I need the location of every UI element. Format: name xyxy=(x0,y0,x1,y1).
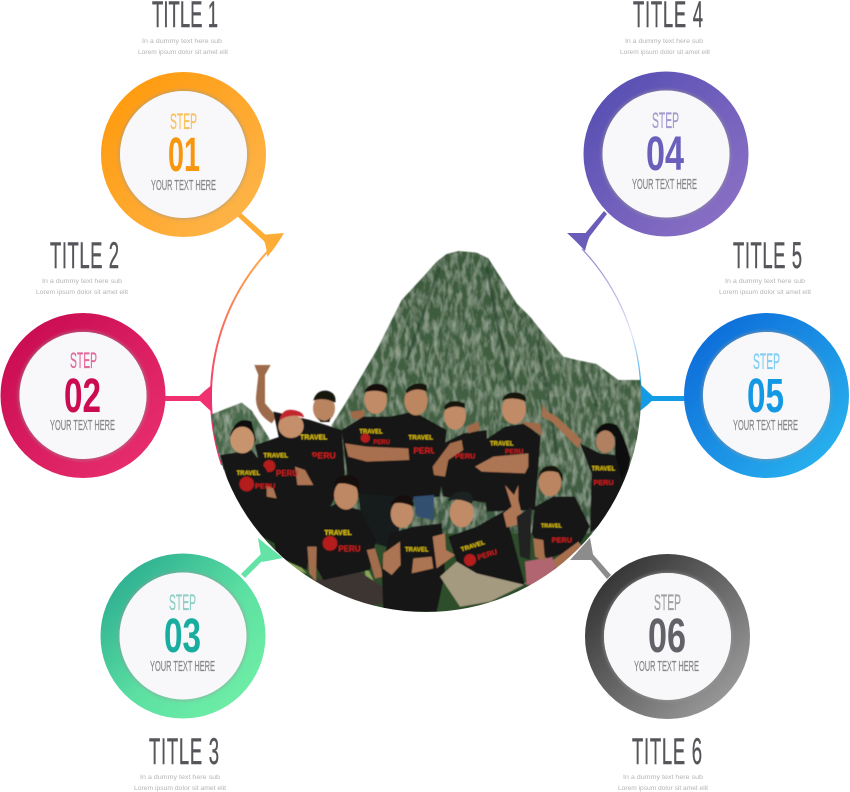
description 6: Lorem ipsum dolor sit amet elit xyxy=(618,786,708,792)
ring 3 xyxy=(110,563,256,709)
label 2 xyxy=(50,348,115,434)
person: center arms crossed: PERU xyxy=(373,440,390,446)
description 1: In a dummy text here sub xyxy=(142,39,223,45)
description 4: Lorem ipsum dolor sit amet elit xyxy=(620,50,710,56)
description 4: In a dummy text here sub xyxy=(625,39,704,45)
description 6: In a dummy text here sub xyxy=(623,775,704,781)
disc 6 xyxy=(602,572,732,702)
title 5: TITLE 5 xyxy=(733,236,802,277)
person: far right crouching xyxy=(517,466,590,585)
person: front right kneeling: TRAVEL xyxy=(460,539,486,554)
description 2: In a dummy text here sub xyxy=(42,279,123,285)
description 1 xyxy=(138,39,228,56)
person: right standing man: TRAVEL xyxy=(490,442,514,448)
person: raised arm man xyxy=(254,365,345,523)
person: far right crouching: TRAVEL xyxy=(541,523,563,529)
title 2: TITLE 2 xyxy=(50,236,119,277)
person: third back: PERU xyxy=(455,451,475,460)
person: front left kneeling: PERU xyxy=(338,545,361,554)
description 2 xyxy=(36,279,128,296)
person: far right crouching: PERU xyxy=(552,536,572,545)
ring 2 xyxy=(10,322,156,468)
person: front right kneeling xyxy=(433,485,527,607)
description 6 xyxy=(618,775,708,792)
person: woman right xyxy=(542,404,631,533)
disc 3 xyxy=(118,571,248,701)
description 4 xyxy=(620,39,710,56)
panel: step 2 xyxy=(10,236,156,468)
label 4: 04 xyxy=(646,128,684,181)
panel: step 1 xyxy=(110,0,256,227)
person: front left kneeling: TRAVEL xyxy=(324,530,352,537)
person: red cap man xyxy=(255,410,317,570)
label 1: 01 xyxy=(168,129,200,182)
ring 1 xyxy=(110,82,256,228)
label 2: STEP xyxy=(70,348,97,373)
photo: team in front of mountain xyxy=(210,251,642,617)
person: standing behind: TRAVEL xyxy=(408,434,433,441)
label 4: STEP xyxy=(652,108,679,133)
connector arc right xyxy=(582,249,641,390)
connector arc left xyxy=(211,251,268,465)
person: woman left: TRAVEL xyxy=(237,471,261,477)
label 6 xyxy=(634,590,699,675)
person: woman left xyxy=(220,420,277,543)
person: center arms crossed xyxy=(342,384,410,550)
ring 4 xyxy=(593,81,739,227)
connector: step 6 xyxy=(570,538,611,579)
label 6: 06 xyxy=(648,610,686,663)
panel: step 4: YOUR TEXT HERE xyxy=(632,176,697,193)
label 5 xyxy=(733,349,798,434)
person: front right kneeling: PERU xyxy=(476,547,498,562)
description 2: Lorem ipsum dolor sit amet elit xyxy=(36,290,128,296)
person: front middle kneeling: TRAVEL xyxy=(405,548,429,554)
panel: step 2: YOUR TEXT HERE xyxy=(50,417,115,434)
person: center arms crossed: TRAVEL xyxy=(359,429,383,435)
description 3: Lorem ipsum dolor sit amet elit xyxy=(134,786,226,792)
panel: step 6 xyxy=(594,564,740,792)
panel: step 6: YOUR TEXT HERE xyxy=(634,658,699,675)
disc 4 xyxy=(601,89,731,219)
panel: step 3 xyxy=(110,563,256,792)
connector: step 2 xyxy=(160,385,212,412)
description 3: In a dummy text here sub xyxy=(140,775,221,781)
description 5 xyxy=(719,279,811,296)
person: raised arm man: PERU xyxy=(312,450,336,460)
description 5: Lorem ipsum dolor sit amet elit xyxy=(719,290,811,296)
disc 5 xyxy=(702,330,832,460)
label 1: STEP xyxy=(170,109,197,134)
description 3 xyxy=(134,775,226,792)
description 1: Lorem ipsum dolor sit amet elit xyxy=(138,50,228,56)
person: front middle kneeling xyxy=(382,495,445,612)
ring 5 xyxy=(694,322,840,468)
label 5: 05 xyxy=(747,370,784,423)
title 6: TITLE 6 xyxy=(632,732,702,773)
person: standing behind: PERU xyxy=(413,445,436,455)
label 4 xyxy=(632,108,697,193)
person: red cap man: PERU xyxy=(276,469,298,478)
panel: step 3: YOUR TEXT HERE xyxy=(150,658,215,675)
label 3: STEP xyxy=(169,590,196,615)
disc 2 xyxy=(18,330,148,460)
label 6: STEP xyxy=(654,590,681,615)
person: woman right: TRAVEL xyxy=(592,467,616,473)
person: front left kneeling xyxy=(307,475,388,610)
ring 6 xyxy=(594,564,740,710)
label 3: 03 xyxy=(164,610,201,663)
person: woman left: PERU xyxy=(255,481,275,490)
label 1 xyxy=(151,109,216,194)
mountain ridges xyxy=(383,270,577,473)
mountain xyxy=(330,250,641,534)
title 3: TITLE 3 xyxy=(149,732,219,773)
person: third back xyxy=(433,401,490,503)
ground xyxy=(260,533,610,617)
person: red cap man: TRAVEL xyxy=(263,452,288,459)
person: standing behind xyxy=(390,383,447,520)
connector: step 1 xyxy=(237,212,284,257)
connector: step 5 xyxy=(640,384,688,411)
person: right standing man xyxy=(475,392,543,512)
disc 1 xyxy=(118,90,248,220)
connector: step 4 xyxy=(567,211,607,251)
small hill xyxy=(210,403,270,470)
label 2: 02 xyxy=(64,370,101,423)
connector: step 3 xyxy=(241,538,283,578)
mountain shadows xyxy=(407,267,597,453)
description 5: In a dummy text here sub xyxy=(725,279,806,285)
panel: step 1: YOUR TEXT HERE xyxy=(151,177,216,194)
person: right standing man: PERU xyxy=(505,448,524,455)
label 5: STEP xyxy=(753,349,780,374)
panel: step 4 xyxy=(593,0,739,227)
panel: step 5 xyxy=(694,236,840,468)
label 3 xyxy=(150,590,215,675)
person: woman right: PERU xyxy=(593,478,614,487)
person: raised arm man: TRAVEL xyxy=(300,434,328,441)
